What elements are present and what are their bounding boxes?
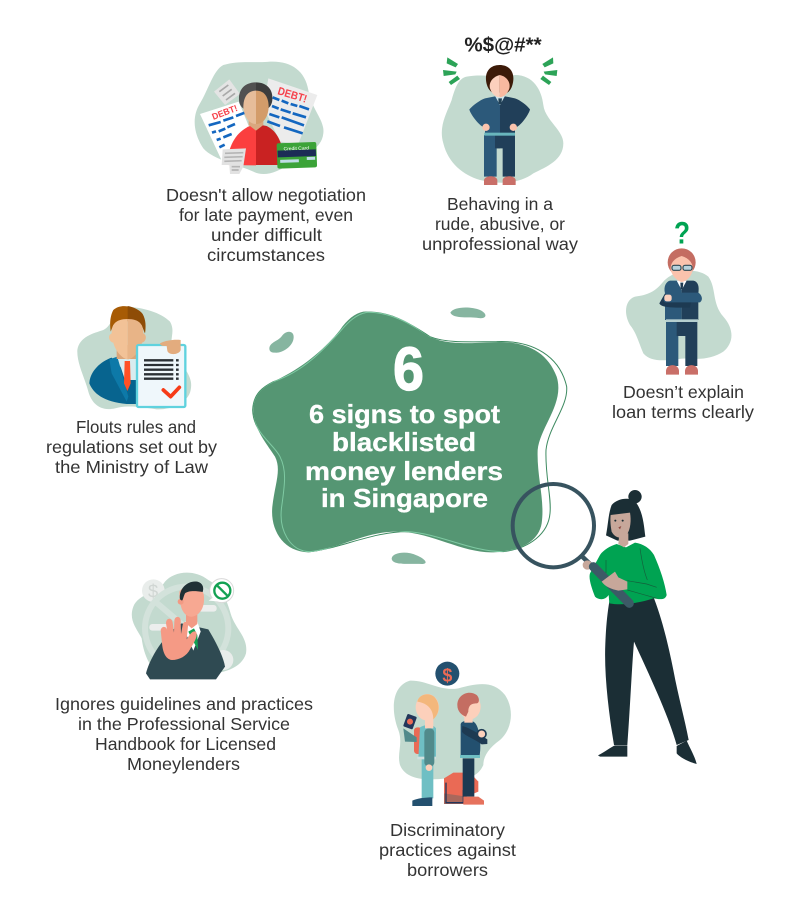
shoes bbox=[598, 745, 627, 757]
text: rude: rude, abusive, or bbox=[435, 214, 565, 234]
text: negotiation: under difficult bbox=[211, 225, 322, 245]
text: flouts: Flouts rules and bbox=[76, 417, 196, 437]
icon: debt person: Credit Card bbox=[284, 145, 309, 151]
text: flouts: regulations set out by bbox=[46, 437, 217, 457]
text: rude: Behaving in a bbox=[447, 194, 553, 214]
text: flouts: the Ministry of Law bbox=[55, 457, 208, 477]
central heading: 6 bbox=[393, 335, 424, 403]
icon: rude man: %$@#** bbox=[464, 35, 542, 57]
icon: debt person: DEBT! bbox=[210, 103, 239, 122]
text: explain: loan terms clearly bbox=[612, 402, 754, 422]
icon: confused man: ? bbox=[674, 214, 690, 250]
icon: refusing man bbox=[132, 573, 246, 679]
sweater bbox=[590, 543, 667, 604]
text: explain: Doesn’t explain bbox=[623, 382, 744, 402]
text: rude: unprofessional way bbox=[422, 234, 578, 254]
text: discriminatory: Discriminatory bbox=[390, 820, 505, 840]
text: ignores: Handbook for Licensed bbox=[95, 734, 276, 754]
trousers bbox=[605, 597, 689, 745]
central heading: in Singapore bbox=[321, 483, 488, 513]
icon: refusing man: $ bbox=[148, 580, 158, 601]
central blob panel bbox=[253, 307, 567, 564]
central heading bbox=[305, 335, 503, 513]
text: negotiation bbox=[166, 185, 366, 265]
central heading: 6 signs to spot bbox=[309, 399, 500, 429]
central heading: money lenders bbox=[305, 456, 503, 486]
icon: debt person: DEBT! bbox=[276, 85, 308, 106]
text: ignores bbox=[55, 694, 313, 774]
icon: debt person bbox=[195, 62, 323, 174]
text: negotiation: for late payment, even bbox=[179, 205, 353, 225]
text: discriminatory bbox=[379, 820, 516, 880]
icon: confused man bbox=[626, 214, 731, 375]
text: negotiation: Doesn't allow negotiation bbox=[166, 185, 366, 205]
text: discriminatory: practices against bbox=[379, 840, 516, 860]
text: ignores: in the Professional Service bbox=[78, 714, 290, 734]
central heading: blacklisted bbox=[332, 427, 476, 457]
illustration: woman with magnifying glass bbox=[513, 484, 697, 764]
text: ignores: Ignores guidelines and practices bbox=[55, 694, 313, 714]
text: explain bbox=[612, 382, 754, 422]
text: rude bbox=[422, 194, 578, 254]
text: negotiation: circumstances bbox=[207, 245, 325, 265]
magnifier bbox=[513, 484, 594, 567]
hair and head bbox=[628, 490, 642, 503]
text: discriminatory: borrowers bbox=[407, 860, 488, 880]
icon: rude man bbox=[442, 35, 563, 185]
text: flouts bbox=[46, 417, 217, 477]
text: ignores: Moneylenders bbox=[127, 754, 240, 774]
icon: contract man bbox=[77, 306, 191, 409]
icon: discrimination pair: $ bbox=[442, 664, 453, 685]
icon: discrimination pair bbox=[394, 662, 511, 806]
